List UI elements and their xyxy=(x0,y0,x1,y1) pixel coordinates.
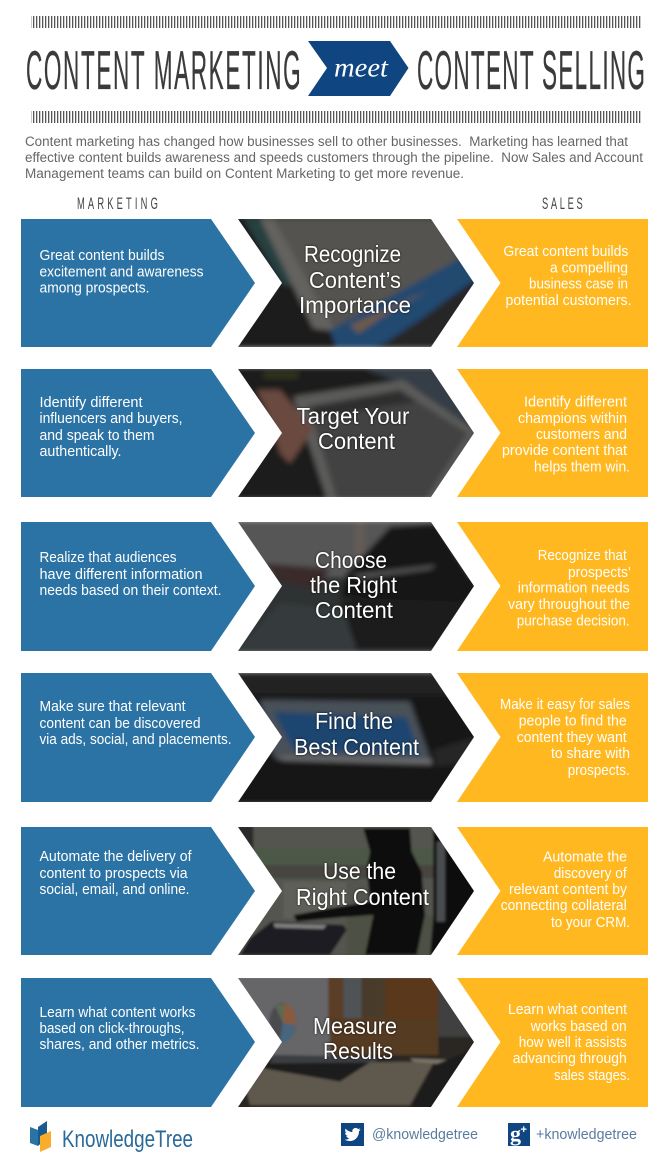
row 4: center panel: Find the xyxy=(315,708,393,734)
row 2: marketing panel: authentically. xyxy=(40,444,122,460)
row 2: sales panel: helps them win. xyxy=(534,460,630,476)
logo: KnowledgeTree xyxy=(30,1121,193,1153)
row 1: marketing panel: Great content builds xyxy=(40,248,164,264)
row 5: sales panel: to your CRM. xyxy=(551,915,630,931)
row 6: center panel: Measure xyxy=(313,1013,397,1039)
column heading: sales: SALES xyxy=(542,194,583,213)
row 1: marketing panel: among prospects. xyxy=(40,281,150,297)
row 6: sales panel: Learn what content xyxy=(508,1002,627,1018)
row 4: sales panel: to share with xyxy=(551,746,630,762)
row 6: marketing panel: Learn what content works xyxy=(40,1005,196,1021)
row 5: sales panel: connecting collateral xyxy=(501,898,627,914)
row 6: sales panel: how well it assists xyxy=(519,1035,627,1051)
row 2: marketing panel: influencers and buyers, xyxy=(40,411,182,427)
google plus handle: + xyxy=(520,1124,527,1136)
column heading: marketing: MARKETING xyxy=(77,194,158,213)
row 1: marketing panel xyxy=(21,219,255,347)
row 3: marketing panel xyxy=(21,522,255,651)
badge: meet arrow xyxy=(308,41,408,96)
google plus handle: g xyxy=(510,1121,521,1146)
row 5: sales panel: discovery of xyxy=(554,866,628,882)
row 6: marketing panel: based on click-throughs, xyxy=(40,1021,184,1037)
row 4: center panel xyxy=(230,672,480,805)
row 2: marketing panel: Identify different xyxy=(40,395,142,411)
row 4: sales panel: people to find the xyxy=(519,714,627,730)
row 2: center panel xyxy=(230,367,480,500)
row 5: marketing panel xyxy=(21,827,255,955)
title: content selling: CONTENT SELLING xyxy=(417,39,645,101)
top striped rule xyxy=(31,16,642,28)
row 3: sales panel: Recognize that xyxy=(538,548,627,564)
logo: KnowledgeTree: KnowledgeTree xyxy=(62,1126,193,1153)
intro paragraph: Management teams can build on Content Marketing to get more revenue. xyxy=(25,166,464,181)
row 5: marketing panel: social, email, and online. xyxy=(40,882,190,898)
intro paragraph xyxy=(25,134,643,181)
intro paragraph: Content marketing has changed how businesses sell to other businesses. Marketing has learned that xyxy=(25,134,628,149)
row 5: marketing panel: Automate the delivery of xyxy=(40,849,192,865)
row 3: center panel: Choose xyxy=(315,547,387,573)
row 4: center panel: Best Content xyxy=(294,734,419,760)
row 1: sales panel xyxy=(457,219,648,347)
row 6: sales panel: advancing through xyxy=(513,1051,627,1067)
row 4: marketing panel: content can be discovered xyxy=(40,716,200,732)
row 5: sales panel xyxy=(457,827,648,955)
row 6: sales panel: sales stages. xyxy=(554,1068,630,1084)
row 2: center panel: Target Your xyxy=(296,403,410,429)
row 2: sales panel: provide content that xyxy=(502,443,627,459)
row 5: center panel: Use the xyxy=(323,858,396,884)
twitter handle: @knowledgetree xyxy=(372,1127,478,1143)
row 6: sales panel: works based on xyxy=(530,1019,627,1035)
title: content marketing: CONTENT MARKETING xyxy=(26,39,301,101)
row 6: center panel xyxy=(230,977,480,1110)
row 4: sales panel: prospects. xyxy=(568,763,630,779)
row 2: center panel: Content xyxy=(318,428,395,454)
row 1: sales panel: a compelling xyxy=(550,261,628,277)
row 3: marketing panel: needs based on their context. xyxy=(40,583,222,599)
row 3: marketing panel: Realize that audiences xyxy=(40,550,176,566)
row 1: sales panel: business case in xyxy=(529,277,628,293)
row 6: marketing panel: shares, and other metrics. xyxy=(40,1037,200,1053)
row 6: marketing panel xyxy=(21,978,255,1107)
row 5: center panel xyxy=(230,825,480,958)
row 2: sales panel: customers and xyxy=(536,427,627,443)
row 4: sales panel: content they want xyxy=(517,730,627,746)
row 3: center panel xyxy=(230,520,480,653)
row 3: sales panel: prospects’ xyxy=(568,565,631,581)
row 4: marketing panel: via ads, social, and placements. xyxy=(40,732,232,748)
row 2: marketing panel xyxy=(21,369,255,497)
row 2: sales panel: champions within xyxy=(518,411,627,427)
row 4: marketing panel xyxy=(21,673,255,802)
row 3: sales panel xyxy=(457,522,648,651)
google plus handle xyxy=(508,1121,637,1146)
row 1: sales panel: potential customers. xyxy=(506,293,632,309)
row 6: center panel: Results xyxy=(323,1038,393,1064)
google plus handle: +knowledgetree xyxy=(536,1127,637,1143)
row 5: sales panel: Automate the xyxy=(543,850,627,866)
row 3: marketing panel: have different information xyxy=(40,567,202,583)
lower striped rule xyxy=(31,111,642,123)
row 1: center panel xyxy=(230,215,480,348)
row 3: center panel: the Right xyxy=(310,572,397,598)
row 1: sales panel: Great content builds xyxy=(503,244,628,260)
row 5: marketing panel: content to prospects via xyxy=(40,866,188,882)
row 3: center panel: Content xyxy=(315,597,393,623)
row 5: center panel: Right Content xyxy=(296,884,429,910)
intro paragraph: effective content builds awareness and speeds customers through the pipeline. Now Sales and Account xyxy=(25,150,643,165)
row 1: center panel: Recognize xyxy=(304,241,401,267)
row 1: center panel: Importance xyxy=(299,292,411,318)
twitter handle xyxy=(341,1123,478,1146)
row 3: sales panel: purchase decision. xyxy=(517,614,630,630)
badge: meet arrow: meet xyxy=(334,53,390,83)
row 5: sales panel: relevant content by xyxy=(509,882,628,898)
row 1: center panel: Content’s xyxy=(309,267,401,293)
row 4: marketing panel: Make sure that relevant xyxy=(40,699,186,715)
row 1: marketing panel: excitement and awareness xyxy=(40,265,204,281)
row 4: sales panel: Make it easy for sales xyxy=(500,697,630,713)
row 6: sales panel xyxy=(457,978,648,1107)
row 3: sales panel: vary throughout the xyxy=(508,597,630,613)
row 4: sales panel xyxy=(457,673,648,802)
row 2: sales panel: Identify different xyxy=(524,395,627,411)
row 2: sales panel xyxy=(457,369,648,497)
row 3: sales panel: information needs xyxy=(518,581,630,597)
row 2: marketing panel: and speak to them xyxy=(40,428,154,444)
